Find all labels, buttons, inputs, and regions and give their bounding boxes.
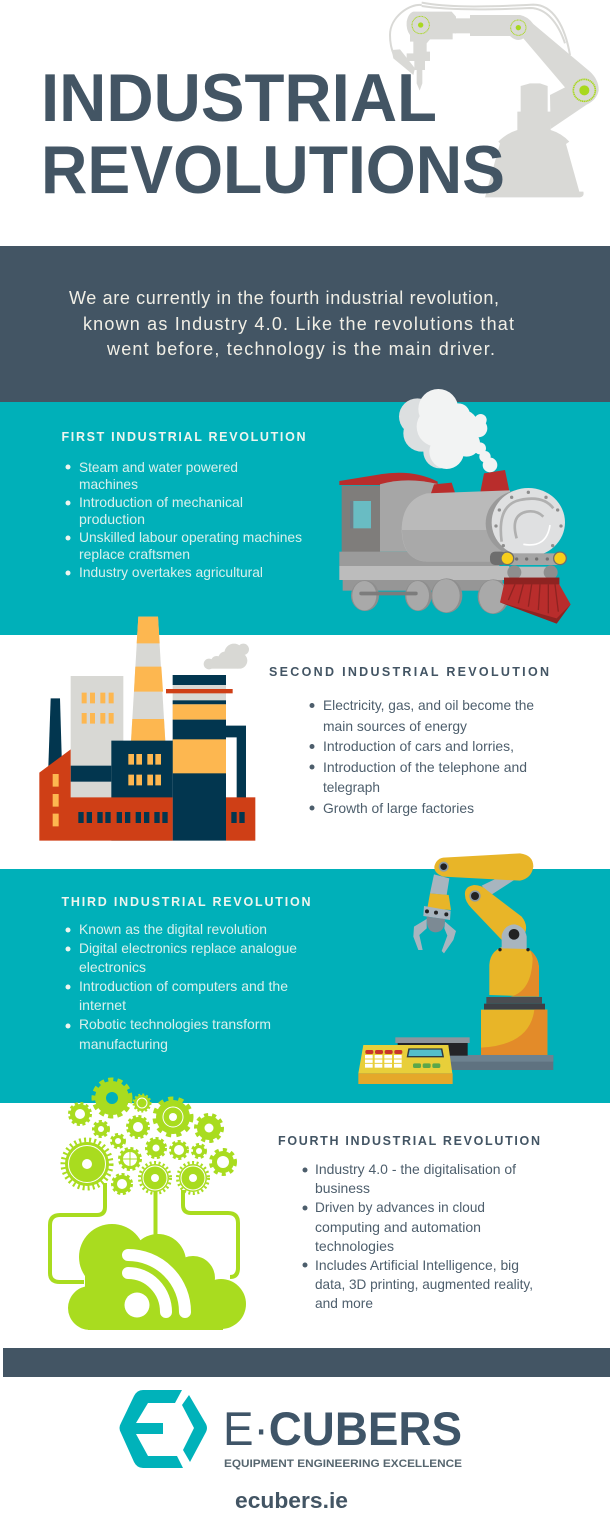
panel: first industrial revolution: production bbox=[79, 511, 145, 527]
panel: third industrial revolution: Introduction of computers and the bbox=[79, 978, 288, 994]
panel: fourth industrial revolution: FOURTH INDUSTRIAL REVOLUTION bbox=[278, 1134, 540, 1148]
icon: gears and cloud with wireless signal bbox=[50, 1080, 246, 1330]
panel: introduction: known as Industry 4.0. Like the revolutions that bbox=[83, 314, 514, 334]
panel: first industrial revolution: Industry overtakes agricultural bbox=[79, 564, 263, 580]
panel: first industrial revolution: Steam and water powered bbox=[79, 459, 238, 475]
wireless signal bbox=[124, 1255, 185, 1318]
panel: second industrial revolution bbox=[0, 635, 610, 869]
logo wordmark: E·CUBERS bbox=[223, 1402, 462, 1455]
panel: first industrial revolution bbox=[0, 402, 610, 635]
title: REVOLUTIONS bbox=[41, 132, 505, 208]
panel: second industrial revolution: Introduction of the telephone and bbox=[323, 759, 527, 775]
panel: second industrial revolution: Electricity, gas, and oil become the bbox=[323, 697, 534, 713]
panel: fourth industrial revolution: Industry 4.0 - the digitalisation of bbox=[315, 1161, 516, 1177]
panel: fourth industrial revolution: technologies bbox=[315, 1238, 394, 1254]
panel: introduction: went before, technology is the main driver. bbox=[106, 339, 495, 359]
logo: E-Cubers bbox=[120, 1390, 462, 1470]
panel: second industrial revolution: Introduction of cars and lorries, bbox=[323, 738, 514, 754]
title: INDUSTRIAL bbox=[41, 60, 437, 136]
panel: third industrial revolution: electronics bbox=[79, 959, 146, 975]
logo mark bbox=[120, 1390, 207, 1468]
panel: fourth industrial revolution: business bbox=[315, 1180, 370, 1196]
panel: fourth industrial revolution bbox=[0, 1103, 610, 1348]
panel: second industrial revolution: SECOND INDUSTRIAL REVOLUTION bbox=[269, 665, 549, 679]
cloud connectors bbox=[50, 1183, 238, 1282]
panel: fourth industrial revolution: data, 3D printing, augmented reality, bbox=[315, 1276, 533, 1292]
panel: first industrial revolution: Unskilled labour operating machines bbox=[79, 529, 302, 545]
icon: factory bbox=[39, 617, 255, 841]
cloud bbox=[68, 1224, 246, 1330]
panel: fourth industrial revolution: Driven by advances in cloud bbox=[315, 1199, 485, 1215]
footer band bbox=[3, 1348, 610, 1377]
panel: third industrial revolution: Robotic technologies transform bbox=[79, 1016, 271, 1032]
panel: third industrial revolution: THIRD INDUSTRIAL REVOLUTION bbox=[62, 895, 310, 909]
website url: ecubers.ie bbox=[235, 1488, 348, 1513]
panel: second industrial revolution: telegraph bbox=[323, 779, 380, 795]
icon: steam locomotive bbox=[339, 389, 571, 624]
panel: fourth industrial revolution: and more bbox=[315, 1295, 373, 1311]
panel: third industrial revolution: manufacturing bbox=[79, 1036, 168, 1052]
logo tagline: EQUIPMENT ENGINEERING EXCELLENCE bbox=[224, 1458, 462, 1470]
panel: fourth industrial revolution: computing and automation bbox=[315, 1219, 481, 1235]
panel: introduction bbox=[0, 246, 610, 402]
panel: introduction: We are currently in the fourth industrial revolution, bbox=[69, 288, 499, 308]
panel: second industrial revolution: Growth of large factories bbox=[323, 800, 474, 816]
panel: first industrial revolution: FIRST INDUSTRIAL REVOLUTION bbox=[62, 430, 306, 444]
panel: first industrial revolution: Introduction of mechanical bbox=[79, 494, 243, 510]
panel: third industrial revolution: Known as the digital revolution bbox=[79, 921, 267, 937]
panel: third industrial revolution bbox=[0, 869, 610, 1103]
title bbox=[41, 60, 505, 208]
panel: first industrial revolution: machines bbox=[79, 476, 138, 492]
panel: fourth industrial revolution: Includes Artificial Intelligence, big bbox=[315, 1257, 519, 1273]
icon: yellow robot arm with control panel bbox=[358, 853, 553, 1084]
panel: third industrial revolution: Digital electronics replace analogue bbox=[79, 940, 297, 956]
gears bbox=[63, 1080, 235, 1194]
panel: first industrial revolution: replace craftsmen bbox=[79, 546, 190, 562]
panel: third industrial revolution: internet bbox=[79, 997, 126, 1013]
icon: industrial robot arm bbox=[390, 3, 599, 197]
panel: second industrial revolution: main sources of energy bbox=[323, 718, 467, 734]
